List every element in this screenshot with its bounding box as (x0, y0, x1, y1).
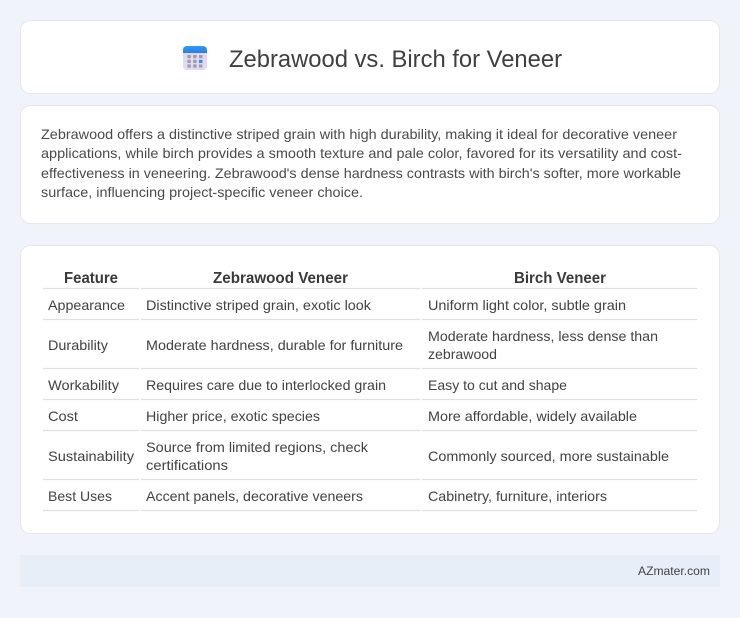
summary text (41, 126, 682, 200)
row: durability: Durability (48, 337, 108, 353)
row: durability: Moderate hardness, less dense than (428, 328, 658, 344)
panel: comparison table (20, 246, 720, 534)
summary text: surface, influencing project-specific veneer choice. (41, 184, 363, 200)
icon: calendar (183, 46, 207, 70)
row: durability: Moderate hardness, durable for furniture (146, 337, 403, 353)
title: Zebrawood vs. Birch for Veneer (229, 46, 562, 73)
row: cost: Cost (48, 408, 78, 424)
row: sustainability: Sustainability (48, 448, 134, 464)
summary text: effectiveness in veneering. Zebrawood's dense hardness contrasts with birch's softer, more workable (41, 165, 681, 181)
footer credit: AZmater.com (638, 564, 710, 578)
row: sustainability (48, 439, 669, 473)
row: appearance (48, 297, 626, 313)
row: best uses: Cabinetry, furniture, interiors (428, 488, 607, 504)
row: sustainability: certifications (146, 457, 228, 473)
header panel (20, 20, 720, 94)
row: workability: Workability (48, 377, 119, 393)
summary text: applications, while birch provides a smooth texture and pale color, favored for its versatility and cost- (41, 145, 682, 161)
row: cost: Higher price, exotic species (146, 408, 320, 424)
row: appearance: Appearance (48, 297, 125, 313)
table header: Feature (64, 270, 118, 287)
row: cost (48, 408, 637, 424)
row: best uses: Accent panels, decorative veneers (146, 488, 363, 504)
row: appearance: Uniform light color, subtle grain (428, 297, 626, 313)
row: durability (48, 328, 658, 362)
row: best uses: Best Uses (48, 488, 112, 504)
row: sustainability: Source from limited regions, check (146, 439, 369, 455)
row: appearance: Distinctive striped grain, exotic look (146, 297, 372, 313)
row: workability: Requires care due to interlocked grain (146, 377, 386, 393)
table header: Zebrawood Veneer (213, 270, 348, 287)
table header: Birch Veneer (514, 270, 606, 287)
row: sustainability: Commonly sourced, more sustainable (428, 448, 669, 464)
table header (64, 270, 606, 287)
row: workability (48, 377, 567, 393)
panel: summary (20, 106, 720, 224)
row: best uses (48, 488, 607, 504)
footer (20, 555, 720, 587)
summary text: Zebrawood offers a distinctive striped grain with high durability, making it ideal for decorative veneer (41, 126, 677, 142)
row: workability: Easy to cut and shape (428, 377, 567, 393)
row: durability: zebrawood (428, 346, 497, 362)
row: cost: More affordable, widely available (428, 408, 637, 424)
